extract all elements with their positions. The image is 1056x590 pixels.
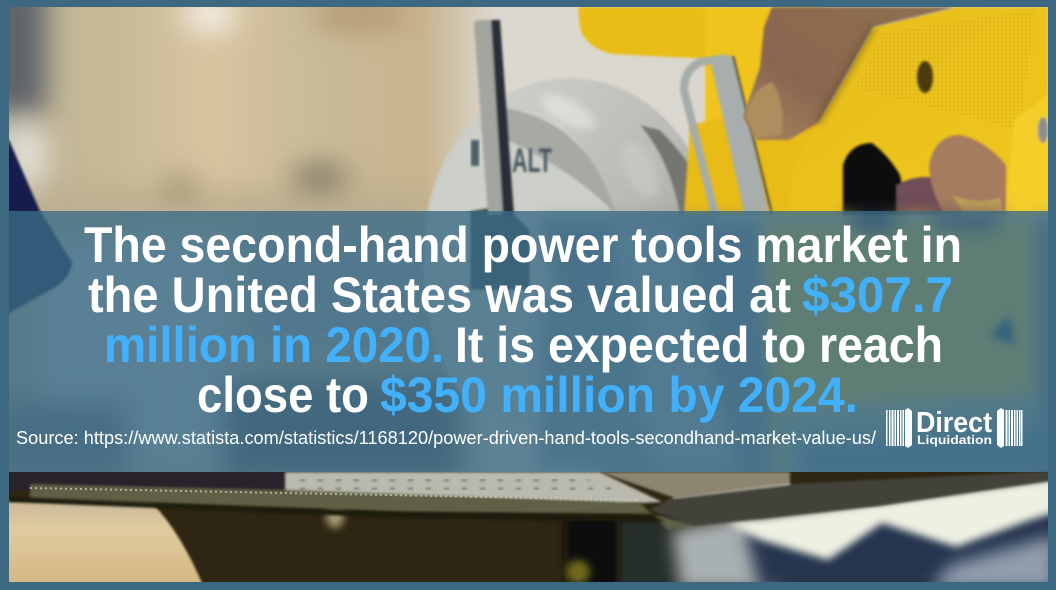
headline line 1: The second-hand power tools market in <box>84 217 962 273</box>
blade guard lettering: ALT <box>512 142 552 180</box>
angled blade band on the right <box>650 471 1056 526</box>
handle grip texture <box>855 10 1035 130</box>
logo wordmark: Direct <box>916 407 992 439</box>
sawdust flare <box>672 515 790 590</box>
headline line 3 <box>104 317 943 373</box>
dark wood face <box>0 472 1056 590</box>
source citation: Source: https://www.statista.com/statistics/1168120/power-driven-hand-tools-secondhand-market-value-us/ <box>16 428 876 448</box>
translucent text banner <box>0 211 1056 472</box>
wood plank <box>0 501 205 590</box>
logo wordmark: Liquidation <box>917 433 992 447</box>
silver saw guard <box>424 78 716 426</box>
thumb <box>743 7 956 140</box>
headline line 4: close to <box>197 367 369 423</box>
saw blade band <box>30 484 690 530</box>
centre brown patch <box>600 472 790 498</box>
tan knot on the wood <box>326 504 344 528</box>
black grip opening <box>843 143 908 215</box>
shadow between thumb and handle <box>818 27 873 123</box>
dark blue object on the left <box>0 140 72 318</box>
pale grey lower corner <box>930 535 1056 590</box>
plate perforations <box>300 480 620 489</box>
rim highlights <box>536 87 665 203</box>
olive spot <box>566 560 590 584</box>
thumbnail <box>746 82 783 138</box>
dark band under blade <box>9 497 665 522</box>
headline line 3: It is expected to reach <box>455 317 943 373</box>
right-hand housing strip <box>1006 90 1056 215</box>
dark blue shadows <box>745 490 1056 590</box>
dark top edge <box>0 472 295 490</box>
handle hole <box>917 61 933 93</box>
yellow saw housing <box>578 7 850 215</box>
headline line 2: $307.7 <box>802 267 953 323</box>
lower saw guard under the banner <box>540 218 775 480</box>
silver blade plate <box>285 472 662 504</box>
small dark notch in the housing <box>990 315 1014 345</box>
lower saw region <box>0 471 1056 590</box>
logo: Direct Liquidation <box>886 407 1022 448</box>
headline line 3: million in 2020. <box>104 317 444 373</box>
headline <box>84 217 962 423</box>
headline line 4: $350 million by 2024. <box>380 367 858 423</box>
left barcode <box>886 408 912 448</box>
vertical metal lever <box>474 20 514 215</box>
metal loop lever <box>684 56 772 218</box>
fingers <box>896 135 1006 215</box>
headline line 2: the United States was valued at <box>88 267 791 323</box>
white blurred teeth <box>727 478 1056 560</box>
blade teeth <box>30 488 640 500</box>
lower housing under the banner <box>760 212 1056 480</box>
right barcode <box>997 408 1022 448</box>
yellow handle <box>790 7 1048 215</box>
